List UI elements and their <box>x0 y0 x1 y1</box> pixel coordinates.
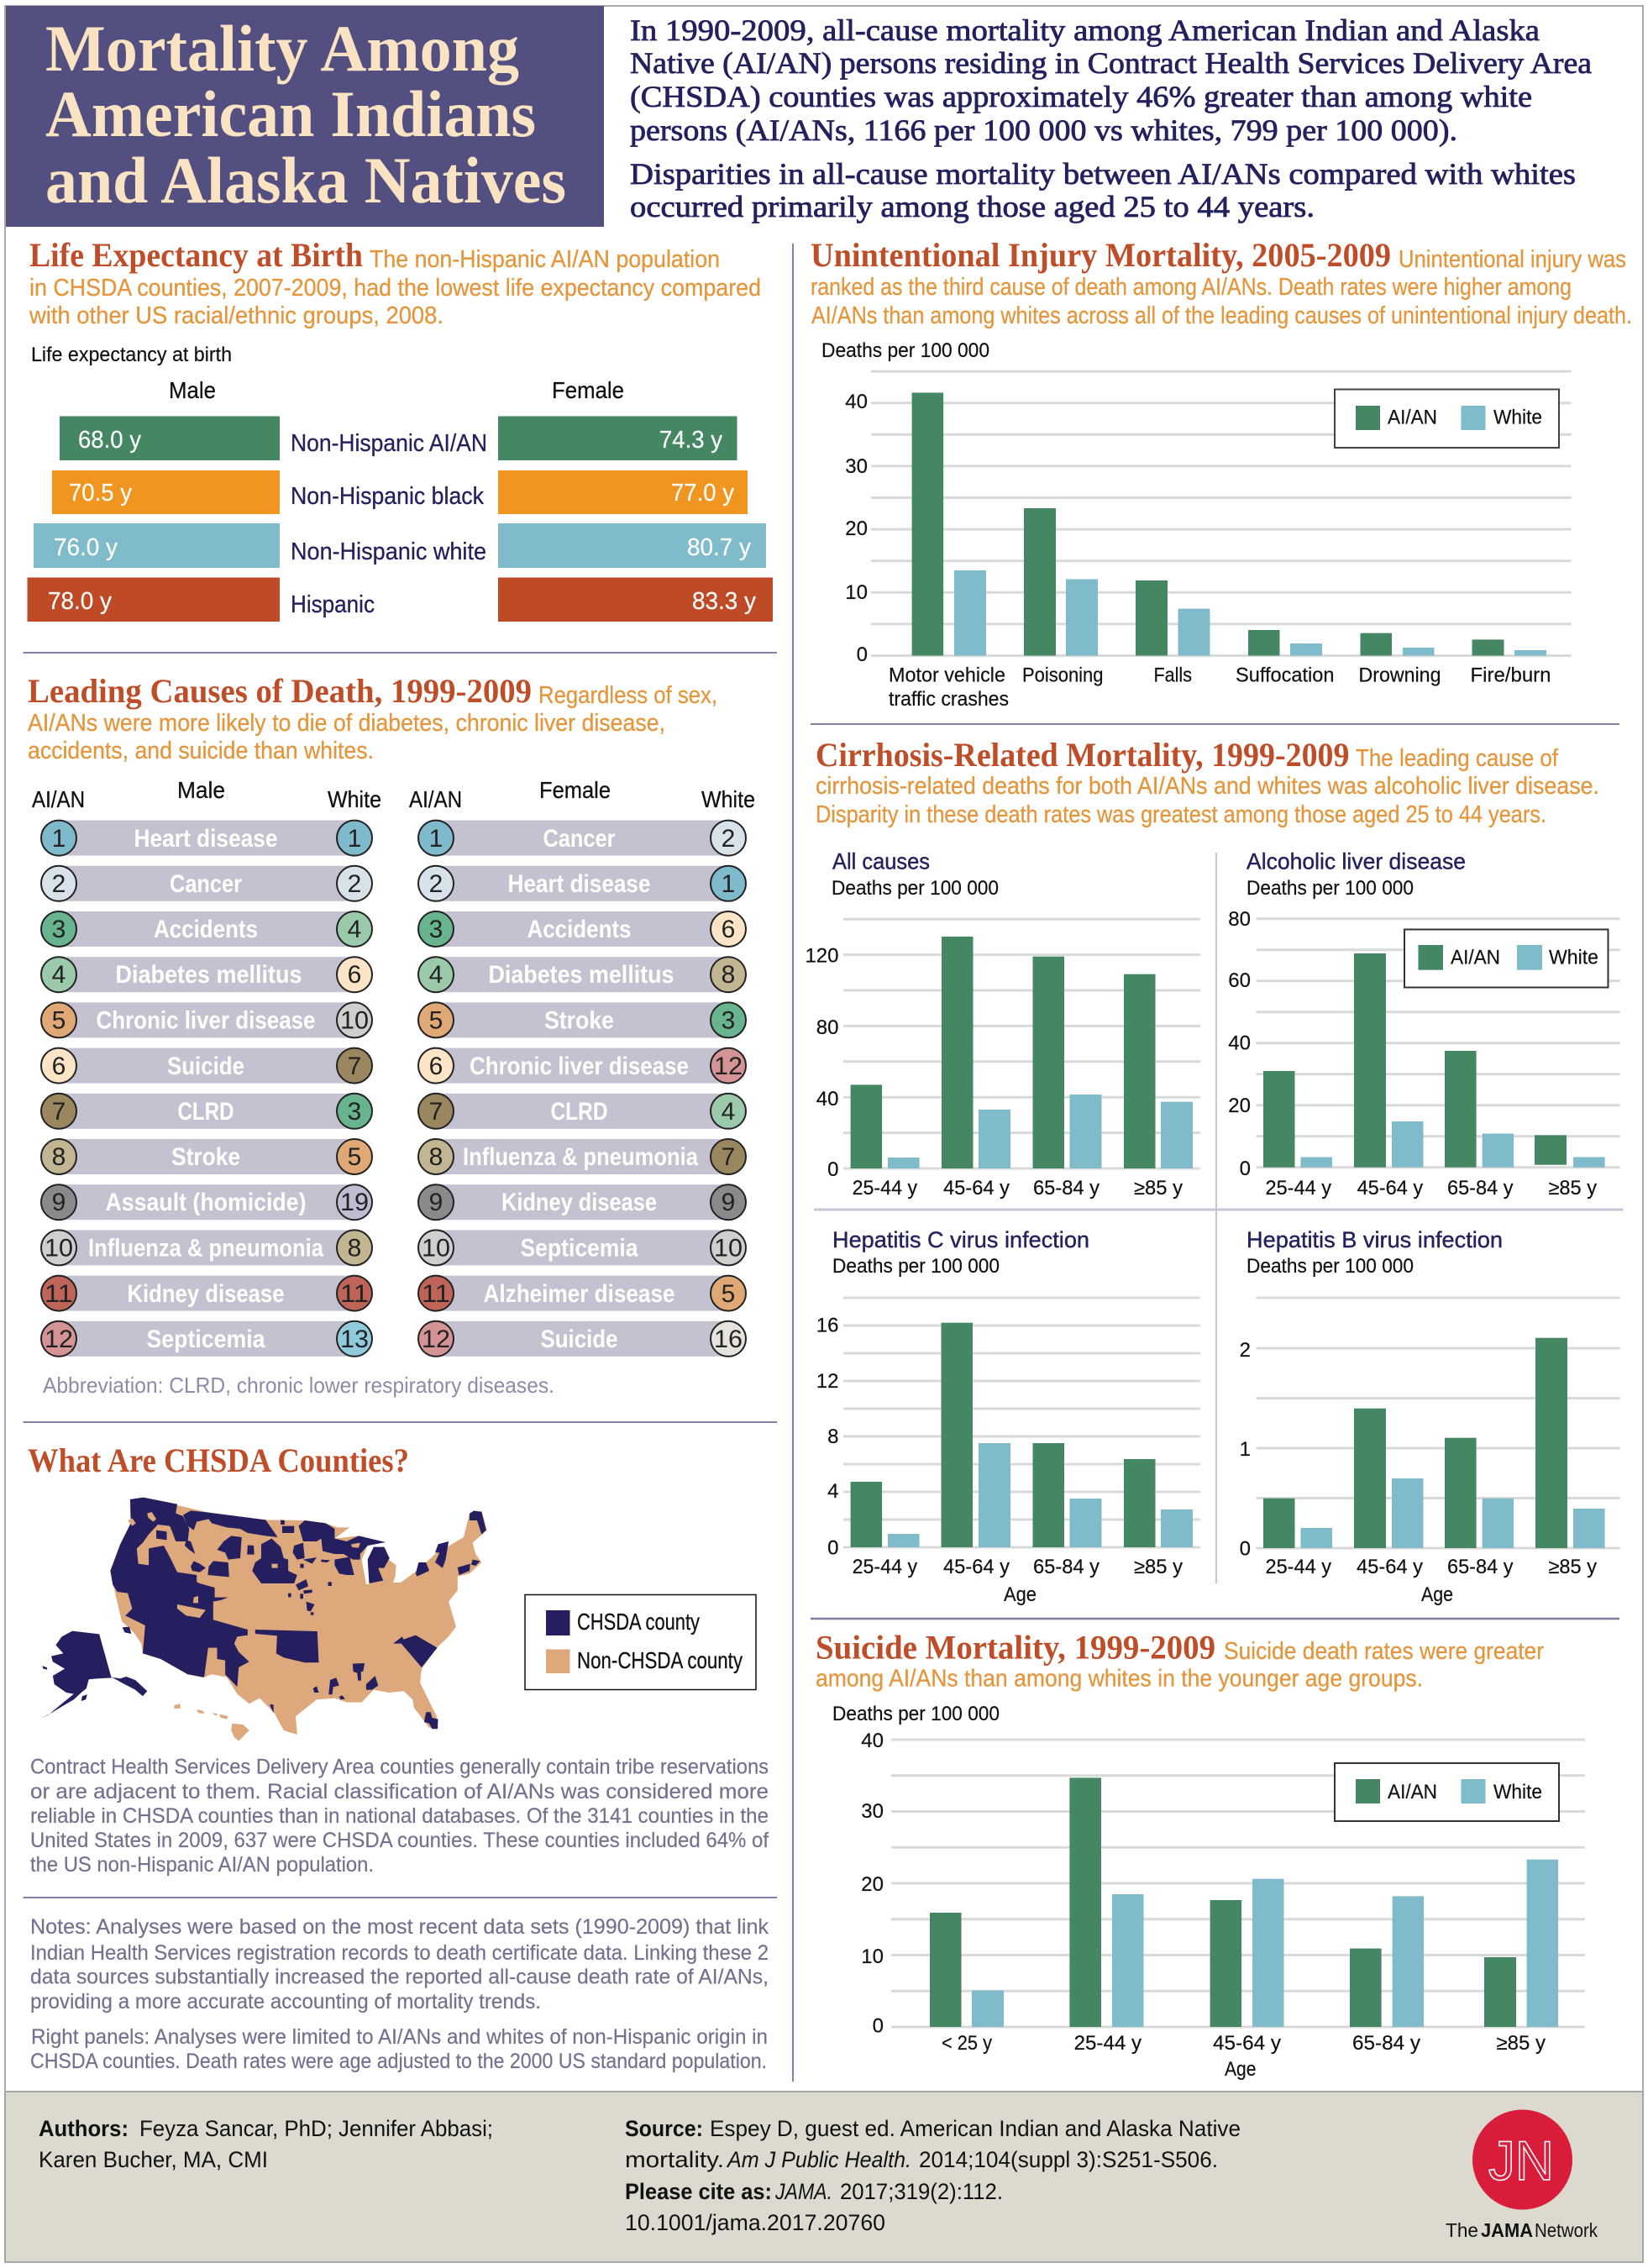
chart legend: AI/AN <box>1451 946 1500 969</box>
female rank list: Diabetes mellitus <box>489 961 674 989</box>
bar chart: suicide: < 25 y <box>942 2032 992 2055</box>
bar chart: suicide: 20 <box>861 1873 884 1896</box>
intro text: (CHSDA) counties was approximately 46% greater than among white <box>630 80 1532 113</box>
column headers: AI/AN <box>409 786 462 812</box>
heading: cirrhosis: Disparity in these death rates was greatest among those aged 25 to 44 years. <box>816 801 1546 828</box>
title banner: and Alaska Natives <box>45 144 566 217</box>
column headers: White <box>701 786 755 812</box>
bars: Hispanic: 78.0 y <box>48 588 112 615</box>
CHSDA description text: the US non-Hispanic AI/AN population. <box>30 1853 374 1877</box>
source and citation <box>625 2116 1241 2235</box>
female rank list: 4 <box>429 961 443 989</box>
heading: cirrhosis: The leading cause of <box>1356 745 1559 772</box>
bar chart: all causes <box>805 848 1200 1200</box>
bar chart: hepatitis C: 16 <box>816 1314 838 1337</box>
source and citation: mortality. <box>625 2147 724 2172</box>
female rank list: 9 <box>722 1189 735 1216</box>
bar chart: suicide: 0 <box>873 2014 884 2038</box>
panel: unintentional injury mortality: Deaths per 100 000 <box>821 339 989 362</box>
bars: non-Hispanic black: 70.5 y <box>69 480 132 507</box>
panel: leading causes of death <box>28 672 755 1398</box>
heading: leading causes: Leading Causes of Death, 1999-2009 <box>28 672 532 710</box>
heading: leading causes: accidents, and suicide than whites. <box>28 738 374 764</box>
heading: suicide <box>816 1628 1544 1692</box>
logo: JAMA Network: The <box>1446 2219 1478 2241</box>
map legend <box>525 1594 756 1690</box>
bar chart: alcoholic liver disease: ≥85 y <box>1549 1177 1597 1200</box>
male rank list: CLRD <box>178 1098 234 1126</box>
bar chart: hepatitis C: Age <box>1004 1583 1037 1606</box>
panel: life expectancy at birth: Male <box>169 377 216 403</box>
bar chart: suicide: 10 <box>861 1945 884 1968</box>
bar chart: unintentional injury: Fire/burn <box>1470 664 1551 687</box>
bar chart: hepatitis C <box>816 1227 1200 1606</box>
female rank list: 7 <box>429 1098 443 1126</box>
bar chart: alcoholic liver disease: 60 <box>1228 969 1251 992</box>
female rank list: 1 <box>722 870 735 898</box>
male rank list: Septicemia <box>146 1326 265 1353</box>
logo: JAMA Network <box>1446 2110 1598 2241</box>
bar chart: all causes: 40 <box>816 1088 838 1110</box>
heading: suicide: Suicide Mortality, 1999-2009 <box>816 1628 1215 1667</box>
bars: non-Hispanic white: 76.0 y <box>54 534 118 561</box>
heading: life expectancy <box>29 236 761 329</box>
bar chart: unintentional injury: 40 <box>845 391 868 413</box>
male rank list: 11 <box>340 1280 369 1308</box>
heading: unintentional injury: Unintentional Injury Mortality, 2005-2009 <box>811 236 1391 274</box>
intro text <box>630 13 1592 223</box>
female rank list: 9 <box>429 1189 443 1216</box>
bars: Hispanic <box>27 578 773 622</box>
bar chart: hepatitis C: 65-84 y <box>1033 1556 1100 1578</box>
authors credit <box>39 2116 493 2172</box>
heading: life expectancy: Life Expectancy at Birth <box>29 236 363 274</box>
CHSDA description text: Contract Health Services Delivery Area counties generally contain tribe reservations <box>30 1756 769 1779</box>
logo: JAMA Network: JAMA <box>1481 2219 1533 2241</box>
bar chart: suicide: Age <box>1225 2058 1257 2081</box>
bars: non-Hispanic AI/AN: Non-Hispanic AI/AN <box>291 430 487 457</box>
male rank list: 4 <box>348 916 361 943</box>
bar chart: unintentional injury: 0 <box>857 643 868 666</box>
male rank list: Kidney disease <box>128 1280 284 1308</box>
bars: non-Hispanic black <box>52 470 748 514</box>
source and citation: 10.1001/jama.2017.20760 <box>625 2210 885 2235</box>
source and citation: Espey D, guest ed. American Indian and Alaska Native <box>710 2116 1241 2141</box>
bar chart: hepatitis C: ≥85 y <box>1134 1556 1183 1578</box>
logo: JAMA Network: JN <box>1488 2129 1554 2192</box>
female rank list: 6 <box>722 916 735 943</box>
female rank list: Kidney disease <box>501 1189 657 1216</box>
heading: leading causes <box>28 672 717 764</box>
abbreviation note: Abbreviation: CLRD, chronic lower respiratory diseases. <box>43 1373 554 1398</box>
heading: cirrhosis: cirrhosis-related deaths for both AI/ANs and whites was alcoholic liver disease. <box>816 773 1599 800</box>
male rank list: 8 <box>52 1143 66 1171</box>
male rank list: Accidents <box>154 916 258 943</box>
bar chart: all causes: 45-64 y <box>943 1177 1010 1200</box>
bar chart: suicide: 65-84 y <box>1352 2032 1420 2055</box>
bar chart: hepatitis B: Hepatitis B virus infection <box>1246 1227 1503 1252</box>
bar chart: suicide: ≥85 y <box>1497 2032 1546 2055</box>
female rank list: Heart disease <box>507 870 650 898</box>
authors credit: Karen Bucher, MA, CMI <box>39 2147 268 2172</box>
bar chart: hepatitis C: 45-64 y <box>943 1556 1010 1578</box>
female rank list: 12 <box>714 1053 743 1080</box>
bars: Hispanic: Hispanic <box>291 591 375 618</box>
bar chart: unintentional injury: Motor vehicle <box>889 664 1005 687</box>
panel: unintentional injury mortality <box>811 236 1632 711</box>
notes text block: data sources substantially increased the reported all-cause death rate of AI/ANs, <box>30 1966 769 1989</box>
chart legend: AI/AN <box>1388 407 1437 428</box>
bar chart: hepatitis C: 0 <box>827 1537 838 1559</box>
panel: life expectancy at birth: Female <box>552 377 624 403</box>
bar chart: alcoholic liver disease: Alcoholic liver disease <box>1246 848 1466 874</box>
bar chart: all causes: All causes <box>832 848 930 874</box>
bar chart: hepatitis B: Deaths per 100 000 <box>1246 1255 1414 1278</box>
male rank list: 4 <box>52 961 66 989</box>
panel: suicide mortality: Deaths per 100 000 <box>832 1703 1000 1725</box>
bars: non-Hispanic white: Non-Hispanic white <box>291 538 486 565</box>
source and citation: Am J Public Health. <box>726 2147 911 2172</box>
male rank list: 3 <box>52 916 66 943</box>
notes text block: Notes: Analyses were based on the most recent data sets (1990-2009) that link <box>30 1915 769 1939</box>
chart legend: White <box>1549 946 1598 969</box>
male rank list: 2 <box>348 870 361 898</box>
bar chart: suicide: 45-64 y <box>1213 2032 1281 2055</box>
male rank list: Chronic liver disease <box>96 1006 316 1035</box>
heading: life expectancy: with other US racial/ethnic groups, 2008. <box>29 302 443 329</box>
bar chart: suicide: 30 <box>861 1800 884 1823</box>
female rank list: Chronic liver disease <box>470 1053 689 1080</box>
male rank list: 19 <box>340 1189 369 1216</box>
female rank list: 5 <box>429 1006 443 1035</box>
male rank list: 11 <box>45 1280 73 1308</box>
bars: non-Hispanic white: 80.7 y <box>687 534 751 561</box>
female rank list: Accidents <box>527 916 632 943</box>
male rank list: 13 <box>340 1326 369 1353</box>
authors credit: Authors: <box>39 2116 129 2141</box>
bar chart: unintentional injury: Suffocation <box>1236 664 1334 687</box>
bars: non-Hispanic AI/AN: 68.0 y <box>78 427 141 454</box>
male rank list: 6 <box>52 1053 66 1080</box>
CHSDA description text: United States in 2009, 637 were CHSDA counties. These counties included 64% of <box>30 1829 769 1852</box>
bar chart: alcoholic liver disease: 20 <box>1228 1095 1251 1117</box>
bar chart: hepatitis C: Hepatitis C virus infection <box>832 1227 1089 1252</box>
source and citation: JAMA. <box>774 2179 832 2204</box>
male rank list: 9 <box>52 1189 66 1216</box>
female rank list: 3 <box>722 1006 735 1035</box>
female rank list: 1 <box>429 825 443 853</box>
intro text: Disparities in all-cause mortality between AI/ANs compared with whites <box>630 157 1576 191</box>
male rank list: 8 <box>348 1235 361 1262</box>
source and citation: Please cite as: <box>625 2179 772 2204</box>
heading: cirrhosis <box>816 736 1599 828</box>
heading: unintentional injury <box>811 236 1632 329</box>
bars: non-Hispanic black: Non-Hispanic black <box>291 483 484 510</box>
female rank list: Septicemia <box>521 1235 638 1262</box>
column headers: Female <box>539 777 611 803</box>
bar chart: unintentional injury: 10 <box>845 581 868 604</box>
bar chart: suicide: 25-44 y <box>1074 2032 1142 2055</box>
bars: non-Hispanic AI/AN: 74.3 y <box>659 427 722 454</box>
bar chart: hepatitis C: 4 <box>827 1480 838 1503</box>
female rank list: Alzheimer disease <box>484 1280 675 1308</box>
bar chart: hepatitis B: 0 <box>1240 1537 1251 1561</box>
bar chart: hepatitis C: 12 <box>816 1370 838 1393</box>
male rank list: 10 <box>340 1006 369 1035</box>
female rank list: 2 <box>429 870 443 898</box>
panel: life expectancy at birth <box>27 236 773 622</box>
intro text: occurred primarily among those aged 25 to 44 years. <box>630 190 1315 223</box>
female rank list: 2 <box>722 825 735 853</box>
intro text: Native (AI/AN) persons residing in Contract Health Services Delivery Area <box>630 46 1592 80</box>
CHSDA description text: reliable in CHSDA counties than in national databases. Of the 3141 counties in the <box>30 1804 769 1828</box>
male rank list: 10 <box>45 1235 73 1262</box>
chart legend: White <box>1493 1781 1542 1803</box>
bar chart: hepatitis B: Age <box>1421 1583 1453 1606</box>
logo: JAMA Network: Network <box>1535 2219 1598 2241</box>
bar chart: alcoholic liver disease: 65-84 y <box>1447 1177 1514 1200</box>
bar chart: alcoholic liver disease: 80 <box>1228 908 1251 931</box>
male rank list: 3 <box>348 1098 361 1126</box>
female rank list: 8 <box>429 1143 443 1171</box>
column headers: White <box>328 786 381 812</box>
panel: life expectancy at birth: Life expectancy at birth <box>31 344 232 366</box>
male rank list: Heart disease <box>134 825 277 853</box>
heading: leading causes: AI/ANs were more likely to die of diabetes, chronic liver disease, <box>28 710 665 737</box>
intro text: persons (AI/ANs, 1166 per 100 000 vs whites, 799 per 100 000). <box>630 113 1457 147</box>
bar chart: alcoholic liver disease: Deaths per 100 000 <box>1246 877 1414 900</box>
column headers <box>32 777 755 812</box>
female rank list: 7 <box>722 1143 735 1171</box>
male rank list: Assault (homicide) <box>106 1189 306 1216</box>
heading: cirrhosis: Cirrhosis-Related Mortality, 1999-2009 <box>816 736 1349 774</box>
male rank list: Suicide <box>167 1053 244 1080</box>
bars: non-Hispanic AI/AN <box>60 417 737 460</box>
bar chart: hepatitis B: 25-44 y <box>1265 1556 1331 1578</box>
male rank list: Diabetes mellitus <box>116 961 302 989</box>
source and citation: 2017;319(2):112. <box>840 2179 1003 2204</box>
female rank list: 8 <box>722 961 735 989</box>
female rank list: 16 <box>714 1326 743 1353</box>
bar chart: all causes: 0 <box>827 1158 838 1181</box>
male rank list: 5 <box>348 1143 361 1171</box>
bar chart: all causes: 65-84 y <box>1033 1177 1100 1200</box>
male rank list: Cancer <box>170 870 242 898</box>
column headers: AI/AN <box>32 786 85 812</box>
bar chart: unintentional injury: Falls <box>1154 664 1192 687</box>
bar chart: alcoholic liver disease <box>1228 848 1620 1200</box>
bar chart: unintentional injury <box>845 371 1572 711</box>
chart legend <box>1335 1763 1559 1821</box>
source and citation: 2014;104(suppl 3):S251-S506. <box>919 2147 1218 2172</box>
bar chart: all causes: ≥85 y <box>1134 1177 1183 1200</box>
female rank list: 11 <box>422 1280 450 1308</box>
bars: Hispanic: 83.3 y <box>692 588 756 615</box>
female rank list: Stroke <box>544 1006 614 1035</box>
bar chart: alcoholic liver disease: 25-44 y <box>1265 1177 1331 1200</box>
bar chart: hepatitis C: 8 <box>827 1425 838 1448</box>
bar chart: hepatitis B <box>1240 1227 1620 1606</box>
male rank list: 5 <box>52 1006 66 1035</box>
male rank list <box>41 821 372 1357</box>
CHSDA description text <box>30 1756 769 1877</box>
bar chart: unintentional injury: Drowning <box>1359 664 1441 687</box>
heading: leading causes: Regardless of sex, <box>538 682 717 709</box>
bar chart: all causes: 120 <box>805 944 838 968</box>
bar chart: alcoholic liver disease: 0 <box>1240 1158 1251 1180</box>
male rank list: 1 <box>52 825 66 853</box>
female rank list <box>418 821 746 1357</box>
female rank list: 10 <box>422 1235 450 1262</box>
map legend: Non-CHSDA county <box>577 1647 743 1673</box>
map: CHSDA counties of the US <box>41 1498 487 1741</box>
heading: life expectancy: The non-Hispanic AI/AN population <box>370 246 720 273</box>
female rank list: 4 <box>722 1098 735 1126</box>
female rank list: Suicide <box>541 1326 618 1353</box>
heading: suicide: Suicide death rates were greater <box>1224 1638 1544 1665</box>
female rank list: 12 <box>422 1326 450 1353</box>
panel: suicide mortality <box>816 1628 1585 2081</box>
bar chart: all causes: Deaths per 100 000 <box>832 877 999 900</box>
female rank list: CLRD <box>551 1098 608 1126</box>
bar chart: hepatitis B: 1 <box>1240 1438 1251 1461</box>
notes text block <box>30 1915 769 2073</box>
map legend: CHSDA county <box>577 1609 700 1635</box>
female rank list: 10 <box>714 1235 743 1262</box>
female rank list: Influenza & pneumonia <box>463 1143 698 1171</box>
notes text block: Indian Health Services registration records to death certificate data. Linking these 2 <box>30 1941 769 1965</box>
intro text: In 1990-2009, all-cause mortality among American Indian and Alaska <box>630 13 1540 47</box>
male rank list: 12 <box>45 1326 73 1353</box>
bar chart: suicide <box>861 1730 1585 2081</box>
chart legend: White <box>1493 407 1542 428</box>
bars: non-Hispanic white <box>34 523 766 568</box>
male rank list: 7 <box>52 1098 66 1126</box>
male rank list: 2 <box>52 870 66 898</box>
authors credit: Feyza Sancar, PhD; Jennifer Abbasi; <box>139 2116 493 2141</box>
bar chart: hepatitis C: Deaths per 100 000 <box>832 1255 1000 1278</box>
footer panel <box>5 2092 1643 2262</box>
female rank list: 6 <box>429 1053 443 1080</box>
bar chart: hepatitis B: 65-84 y <box>1447 1556 1514 1578</box>
female rank list: 3 <box>429 916 443 943</box>
chart legend <box>1335 390 1559 448</box>
male rank list: 6 <box>348 961 361 989</box>
male rank list: Stroke <box>171 1143 240 1171</box>
column headers: Male <box>177 777 225 803</box>
bar chart: suicide: 40 <box>861 1730 884 1752</box>
heading: CHSDA counties: What Are CHSDA Counties? <box>28 1441 409 1479</box>
notes text block: CHSDA counties. Death rates were age adjusted to the 2000 US standard population. <box>30 2050 767 2073</box>
bar chart: hepatitis B: 2 <box>1240 1339 1251 1362</box>
title banner: American Indians <box>45 77 536 150</box>
male rank list: Influenza & pneumonia <box>88 1235 323 1262</box>
bar chart: unintentional injury: 20 <box>845 517 868 540</box>
source and citation: Source: <box>625 2116 703 2141</box>
title banner <box>6 6 604 227</box>
female rank list: Cancer <box>543 825 616 853</box>
title banner: Mortality Among <box>45 12 519 85</box>
heading: life expectancy: in CHSDA counties, 2007-2009, had the lowest life expectancy compared <box>29 275 761 302</box>
heading: suicide: among AI/ANs than among whites in the younger age groups. <box>816 1665 1423 1692</box>
bar chart: hepatitis B: 45-64 y <box>1357 1556 1423 1578</box>
male rank list: 1 <box>348 825 361 853</box>
panel: what are CHSDA counties <box>28 1441 769 1877</box>
bar chart: hepatitis C: 25-44 y <box>853 1556 917 1578</box>
bar chart: unintentional injury: 30 <box>845 455 868 478</box>
bar chart: unintentional injury: traffic crashes <box>889 688 1009 711</box>
notes text block: providing a more accurate accounting of mortality trends. <box>30 1990 541 2013</box>
bar chart: all causes: 25-44 y <box>853 1177 917 1200</box>
bars: non-Hispanic black: 77.0 y <box>671 480 734 507</box>
bar chart: alcoholic liver disease: 40 <box>1228 1032 1251 1055</box>
bar chart: alcoholic liver disease: 45-64 y <box>1357 1177 1423 1200</box>
panel: cirrhosis-related mortality <box>805 736 1623 1606</box>
notes text block: Right panels: Analyses were limited to AI/ANs and whites of non-Hispanic origin in <box>31 2025 768 2049</box>
bar chart: all causes: 80 <box>816 1016 838 1039</box>
male rank list: 7 <box>348 1053 361 1080</box>
CHSDA description text: or are adjacent to them. Racial classification of AI/ANs was considered more <box>30 1780 769 1803</box>
chart legend: AI/AN <box>1388 1781 1437 1803</box>
bar chart: unintentional injury: Poisoning <box>1022 664 1104 687</box>
female rank list: 5 <box>722 1280 735 1308</box>
bar chart: hepatitis B: ≥85 y <box>1549 1556 1597 1578</box>
chart legend <box>1404 929 1608 988</box>
